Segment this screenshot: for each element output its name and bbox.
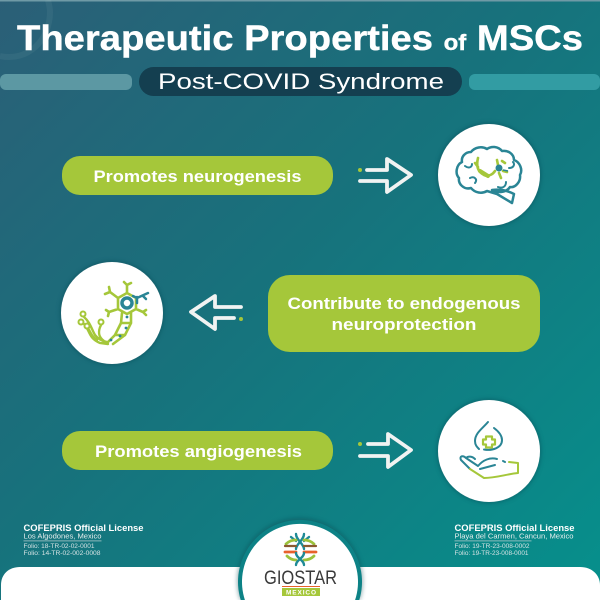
arrow: to neuron icon [191,296,243,329]
logo wordmark: GIOSTAR [264,567,337,589]
logo badge [237,518,363,600]
panel: promotes neurogenesis [62,156,333,195]
subtitle banner: Post-COVID Syndrome [158,69,444,94]
arrow: to hand icon [358,434,411,467]
logo mark [285,534,316,565]
left license block: COFEPRIS Official License [24,523,144,534]
right license block: Playa del Carmen, Cancun, Mexico [454,532,574,540]
right license block: Folio: 19-TR-23-008-0002 [454,544,530,550]
arrow: to brain icon [358,159,411,192]
icon: neuron [60,261,164,365]
bottom white band [1,567,600,600]
left license block: Folio: 18-TR-02-02-0001 [24,544,95,550]
panel: promotes angiogenesis [62,431,333,470]
logo badge: MEXICO [286,590,316,596]
icon: brain with neuron [437,123,541,227]
panel: contribute to endogenous neuroprotection [268,275,540,352]
left license block [24,523,144,557]
left license block: Los Algodones, Mexico [24,532,102,540]
panel: promotes neurogenesis: Promotes neurogenesis [94,167,302,186]
right license block: Folio: 19-TR-23-008-0001 [454,551,529,557]
panel: contribute to endogenous neuroprotection: Contribute to endogenous [288,294,520,313]
panel: contribute to endogenous neuroprotection: neuroprotection [332,315,476,334]
subtitle banner [0,67,600,96]
icon: drop and hand [437,399,541,503]
title: Therapeutic Properties of MSCs [17,19,583,58]
left license block: Folio: 14-TR-02-002-0008 [24,551,101,557]
panel: promotes angiogenesis: Promotes angiogenesis [95,442,302,461]
right license block [454,523,574,557]
right license block: COFEPRIS Official License [454,523,574,534]
